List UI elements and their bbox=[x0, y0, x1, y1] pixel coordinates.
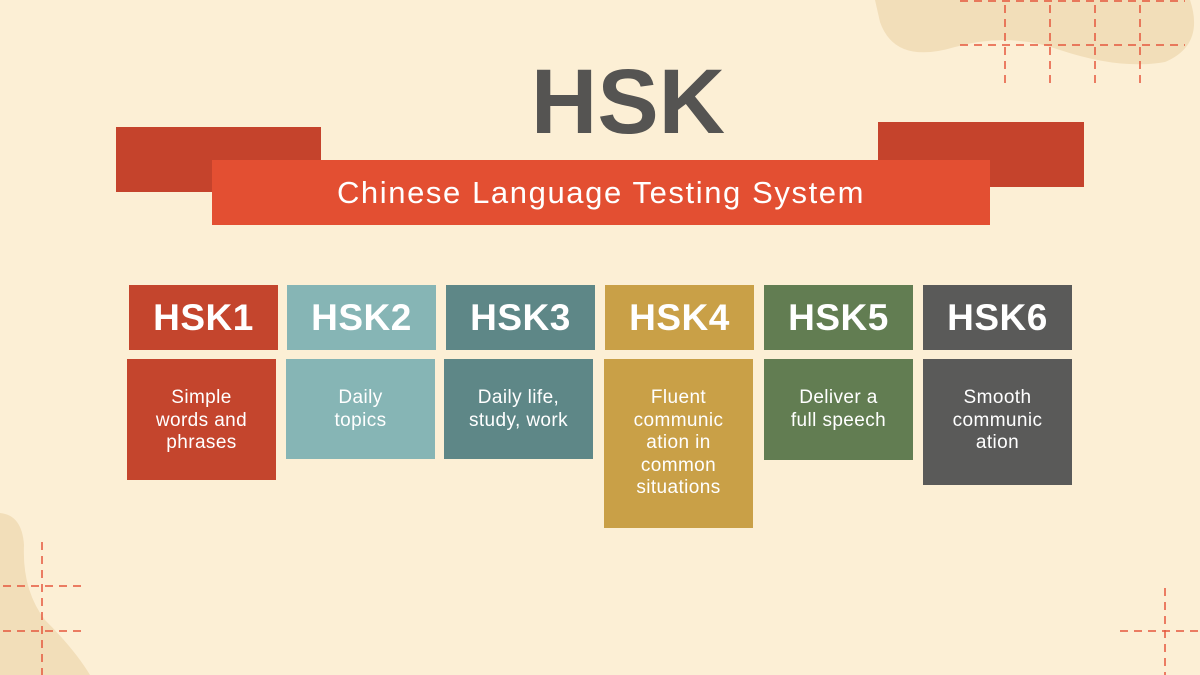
card: HSK3 bbox=[444, 285, 595, 459]
text: phrases bbox=[166, 432, 237, 453]
card: HSK1 bbox=[127, 285, 278, 480]
card: HSK5 bbox=[764, 285, 913, 460]
text: Fluent bbox=[651, 387, 706, 408]
text: full speech bbox=[791, 410, 886, 430]
text: HSK2 bbox=[311, 296, 412, 338]
text: situations bbox=[636, 477, 721, 498]
text: common bbox=[641, 454, 716, 476]
text: communic bbox=[953, 410, 1042, 430]
text: HSK6 bbox=[947, 296, 1048, 338]
text: topics bbox=[334, 410, 387, 430]
card: HSK2 bbox=[286, 285, 436, 459]
text: words and bbox=[156, 410, 247, 430]
text: Daily bbox=[338, 387, 383, 408]
text: Smooth bbox=[964, 387, 1031, 408]
text: HSK5 bbox=[788, 296, 889, 338]
text: communic bbox=[634, 410, 723, 430]
text: HSK4 bbox=[629, 296, 730, 338]
card: HSK6 bbox=[923, 285, 1072, 485]
text: ation in bbox=[646, 432, 711, 453]
text: ation bbox=[976, 432, 1019, 453]
text: HSK3 bbox=[470, 296, 571, 338]
text: Simple bbox=[171, 387, 232, 408]
text: HSK1 bbox=[153, 296, 254, 338]
text: Deliver a bbox=[799, 387, 878, 408]
banner right accent bbox=[878, 122, 1084, 187]
card: HSK4 bbox=[604, 285, 754, 528]
text: Daily life, bbox=[478, 387, 559, 408]
subtitle banner: Chinese Language Testing System bbox=[337, 174, 865, 210]
banner left accent bbox=[116, 127, 321, 192]
subtitle banner bbox=[212, 160, 990, 225]
text: study, work bbox=[469, 410, 568, 430]
title: HSK bbox=[531, 51, 725, 153]
